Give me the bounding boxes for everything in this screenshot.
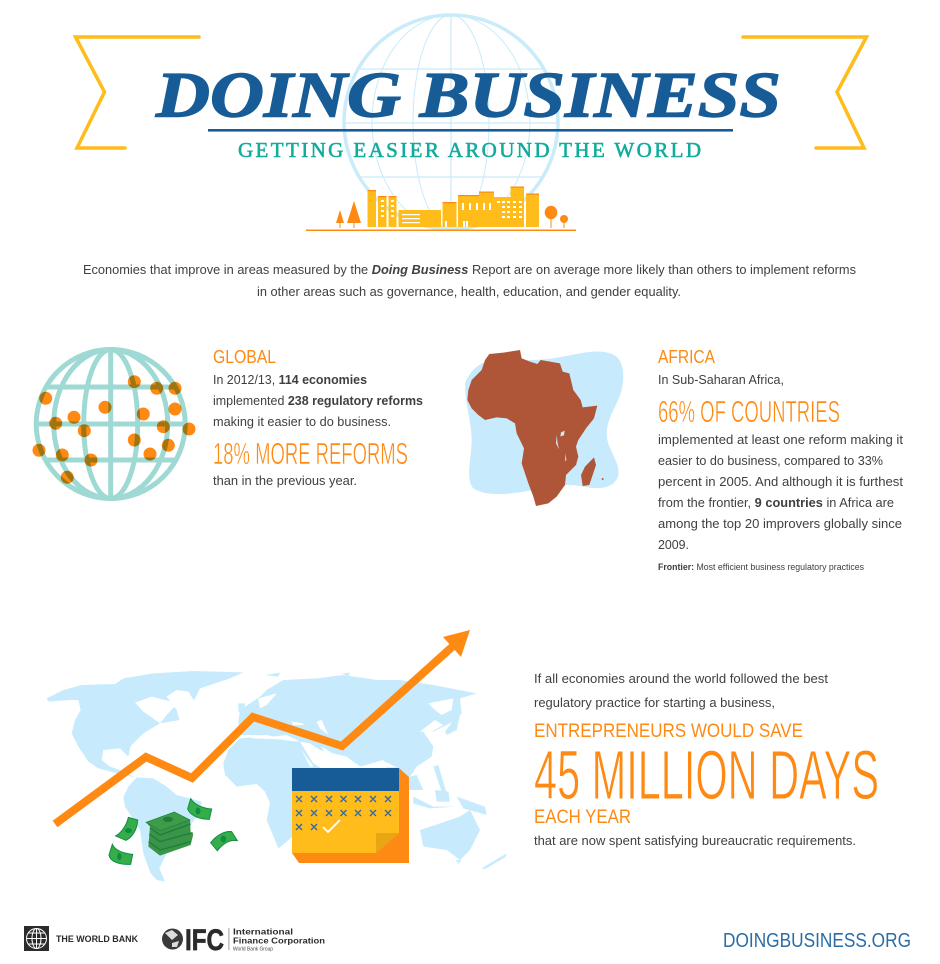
intro text: Economies that improve in areas measured by the Doing Business Report are on average more likely than others to implement reforms [83,262,856,277]
logo: ifc: World Bank Group [233,946,273,952]
panel: savings text [534,671,879,848]
text: africa details: easier to do business, compared to 33% [658,453,883,468]
text: previous year: than in the previous year. [213,473,357,488]
icon: calendar [292,768,409,863]
logo: the world bank [24,926,138,951]
header globe [344,15,558,229]
icon: globe with reform dots [32,349,196,499]
logo: ifc: Finance Corporation [233,936,325,946]
text: best practice intro: regulatory practice for starting a business, [534,695,775,710]
intro text [83,262,856,299]
heading: global: GLOBAL [213,347,276,367]
icon: city skyline [306,186,576,231]
subtitle: GETTING EASIER AROUND THE WORLD [238,138,701,162]
left ribbon bracket [76,37,199,148]
title rule [208,129,733,132]
text: entrepreneurs would save: ENTREPRENEURS WOULD SAVE [534,720,803,742]
logo: ifc: International [233,926,293,936]
footnote: frontier: Frontier: Most efficient business regulatory practices [658,562,864,572]
text: best practice intro: If all economies around the world followed the best [534,671,828,686]
icon: africa map [465,350,623,506]
text: africa details: percent in 2005. And although it is furthest [658,474,903,489]
heading: africa: AFRICA [658,347,715,367]
flying bills [109,799,237,864]
text: africa details [658,432,903,552]
text: each year: EACH YEAR [534,806,631,828]
arrow: rising trend line [55,630,470,824]
logo: ifc: IFC [185,924,224,957]
panel: africa text [658,347,903,572]
panel: global text [213,347,423,488]
text: africa details: implemented at least one reform making it [658,432,903,447]
text: sub-saharan africa: In Sub-Saharan Africa, [658,372,784,387]
logo: the world bank: THE WORLD BANK [56,934,138,945]
text: africa details: from the frontier, 9 countries in Africa are [658,495,894,510]
right ribbon bracket [743,37,866,148]
text: global reforms: In 2012/13, 114 economies [213,372,367,387]
text: africa details: 2009. [658,537,689,552]
title: DOING BUSINESS [155,60,781,132]
stat: 18% more reforms: 18% MORE REFORMS [213,436,408,471]
text: bureaucratic requirements: that are now spent satisfying bureaucratic requirements. [534,833,856,848]
footer url: DOINGBUSINESS.ORG [723,930,911,952]
logo: ifc [162,924,325,957]
bill stack [146,812,193,856]
text: best practice intro [534,671,828,710]
text: global reforms: implemented 238 regulatory reforms [213,393,423,408]
text: global reforms [213,372,423,429]
text: africa details: among the top 20 improvers globally since [658,516,902,531]
intro text: in other areas such as governance, health, education, and gender equality. [257,284,681,299]
text: global reforms: making it easier to do business. [213,414,391,429]
world map [27,671,507,882]
icon: money stack and bills [109,799,237,864]
